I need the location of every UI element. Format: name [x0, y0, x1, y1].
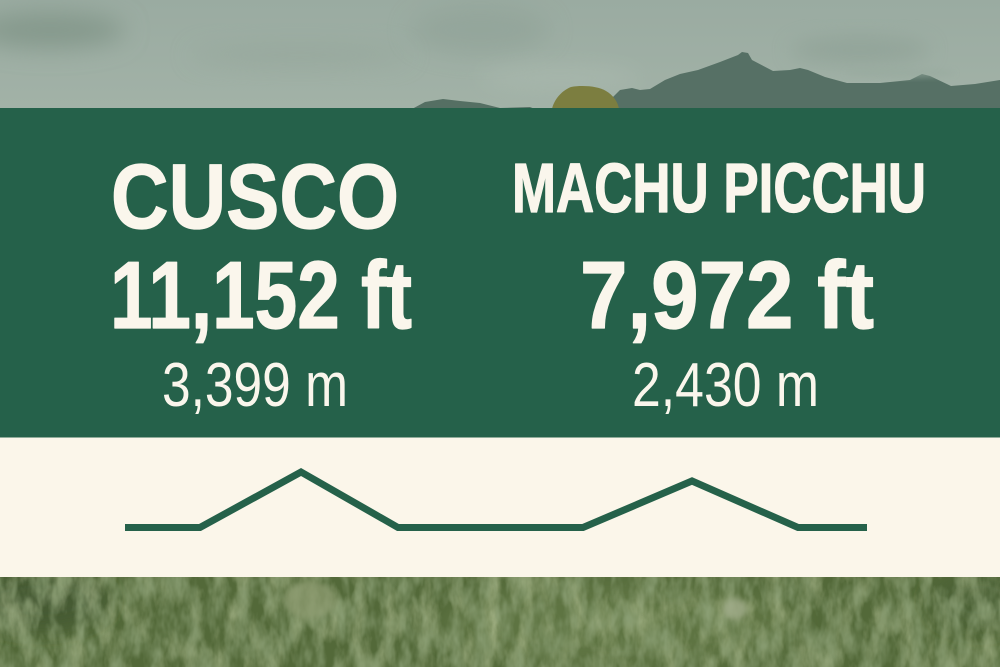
panel: green elevation band [0, 108, 1000, 438]
icon: distant mountain range [610, 52, 1000, 109]
chart: elevation profile line [125, 472, 867, 528]
panel: Cusco elevation [110, 146, 412, 420]
panel: Machu Picchu elevation [512, 149, 926, 420]
text: Cusco elevation in metres: 3,399 m [162, 351, 348, 420]
icon: olive hill [552, 86, 619, 109]
icon: pale clearing left [284, 581, 336, 619]
icon: pale clearing right [723, 598, 747, 620]
panel: cream elevation profile band [0, 438, 1000, 578]
panel: forest photo [0, 570, 1000, 667]
text: Cusco elevation in feet: 11,152 ft [110, 242, 412, 349]
text: Machu Picchu elevation in feet: 7,972 ft [580, 242, 874, 349]
icon: small hill [414, 99, 532, 108]
panel: sky photo with mountains [0, 0, 1000, 109]
heading: Cusco: CUSCO [111, 146, 399, 248]
text: Machu Picchu elevation in metres: 2,430 m [632, 351, 819, 420]
